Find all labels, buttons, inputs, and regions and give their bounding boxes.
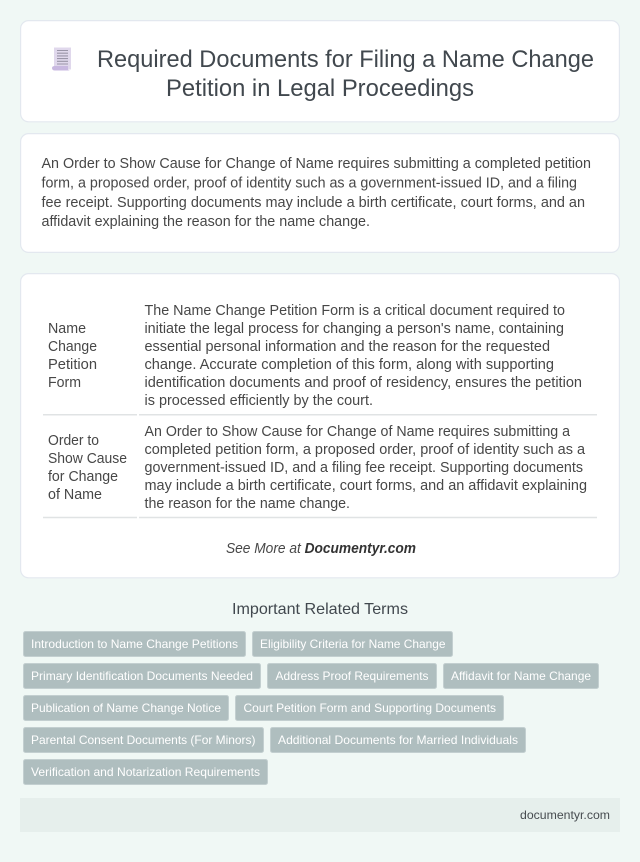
row label: Name Change Petition Form: Name bbox=[48, 321, 86, 337]
intro text: An Order to Show Cause for Change of Name requires submitting a completed petition bbox=[42, 156, 591, 172]
tag: Address Proof Requirements bbox=[276, 669, 428, 683]
title: Required Documents for Filing a Name Change bbox=[97, 46, 594, 73]
tag: Parental Consent Documents (For Minors) bbox=[31, 733, 256, 747]
row label: Name Change Petition Form: Change bbox=[48, 339, 97, 355]
tag: Additional Documents for Married Individuals bbox=[278, 733, 518, 747]
panel: introduction bbox=[21, 134, 619, 252]
row text: Order to Show Cause description: completed petition form, a proposed order, proof of identity such as a bbox=[144, 442, 585, 458]
row label: Order to Show Cause for Change of Name: Show Cause bbox=[48, 451, 127, 467]
row text: Order to Show Cause description bbox=[144, 424, 587, 512]
row text: Name Change Petition Form description: essential personal information and the reason for the requested bbox=[144, 339, 550, 355]
tag bbox=[24, 760, 268, 784]
tag: Eligibility Criteria for Name Change bbox=[260, 637, 446, 651]
row label: Order to Show Cause for Change of Name: of Name bbox=[48, 487, 102, 503]
intro text bbox=[42, 156, 591, 230]
tag: Primary Identification Documents Needed bbox=[31, 669, 253, 683]
heading: related terms: Important Related Terms bbox=[232, 601, 408, 618]
footer: documentyr.com bbox=[520, 808, 610, 822]
see more link: See More at Documentyr.com bbox=[226, 541, 416, 557]
tag: Introduction to Name Change Petitions bbox=[31, 637, 238, 651]
tag bbox=[268, 664, 436, 688]
tag bbox=[24, 632, 246, 656]
title: Petition in Legal Proceedings bbox=[166, 75, 474, 102]
title bbox=[97, 46, 594, 102]
row text: Order to Show Cause description: government-issued ID, and a filing fee receipt. Supporting documents bbox=[144, 460, 583, 476]
panel: documents table bbox=[21, 274, 619, 578]
row label: Order to Show Cause for Change of Name bbox=[48, 433, 127, 503]
row label: Name Change Petition Form: Petition bbox=[48, 357, 97, 373]
row text: Order to Show Cause description: may include a birth certificate, court forms, and an affidavit explaining bbox=[144, 478, 587, 494]
row text: Order to Show Cause description: An Order to Show Cause for Change of Name requires submitting a bbox=[144, 424, 570, 440]
tag bbox=[252, 632, 452, 656]
row text: Name Change Petition Form description: initiate the legal process for changing a person's name, containing bbox=[144, 321, 564, 337]
intro text: fee receipt. Supporting documents may include a birth certificate, court forms, and an bbox=[42, 195, 585, 211]
row text: Name Change Petition Form description bbox=[144, 303, 582, 409]
row label: Order to Show Cause for Change of Name: for Change bbox=[48, 469, 118, 485]
footer bbox=[20, 798, 620, 832]
tag bbox=[24, 696, 228, 720]
tag bbox=[236, 696, 504, 720]
row label: Order to Show Cause for Change of Name: Order to bbox=[48, 433, 99, 449]
row text: Name Change Petition Form description: change. Accurate completion of this form, along with supporting bbox=[144, 357, 554, 373]
intro text: affidavit explaining the reason for the name change. bbox=[42, 214, 370, 230]
row text: Name Change Petition Form description: identification documents and proof of residency, ensures the petition bbox=[144, 375, 582, 391]
row label: Name Change Petition Form bbox=[48, 321, 97, 391]
panel: title card bbox=[21, 21, 619, 122]
row text: Name Change Petition Form description: The Name Change Petition Form is a critical document required to bbox=[144, 303, 565, 319]
intro text: form, a proposed order, proof of identity such as a government-issued ID, and a filing bbox=[42, 176, 577, 192]
row text: Name Change Petition Form description: is processed efficiently by the court. bbox=[144, 393, 373, 409]
tag bbox=[24, 664, 260, 688]
tag bbox=[24, 728, 264, 752]
tag: Verification and Notarization Requirements bbox=[31, 765, 260, 779]
tag: Affidavit for Name Change bbox=[451, 669, 591, 683]
row label: Name Change Petition Form: Form bbox=[48, 375, 81, 391]
icon: document scroll bbox=[52, 48, 71, 70]
tag: Court Petition Form and Supporting Documents bbox=[244, 701, 496, 715]
tag: Publication of Name Change Notice bbox=[31, 701, 221, 715]
tag bbox=[444, 664, 598, 688]
tag list: related terms bbox=[24, 632, 598, 784]
row text: Order to Show Cause description: the reason for the name change. bbox=[144, 496, 350, 512]
tag bbox=[270, 728, 526, 752]
